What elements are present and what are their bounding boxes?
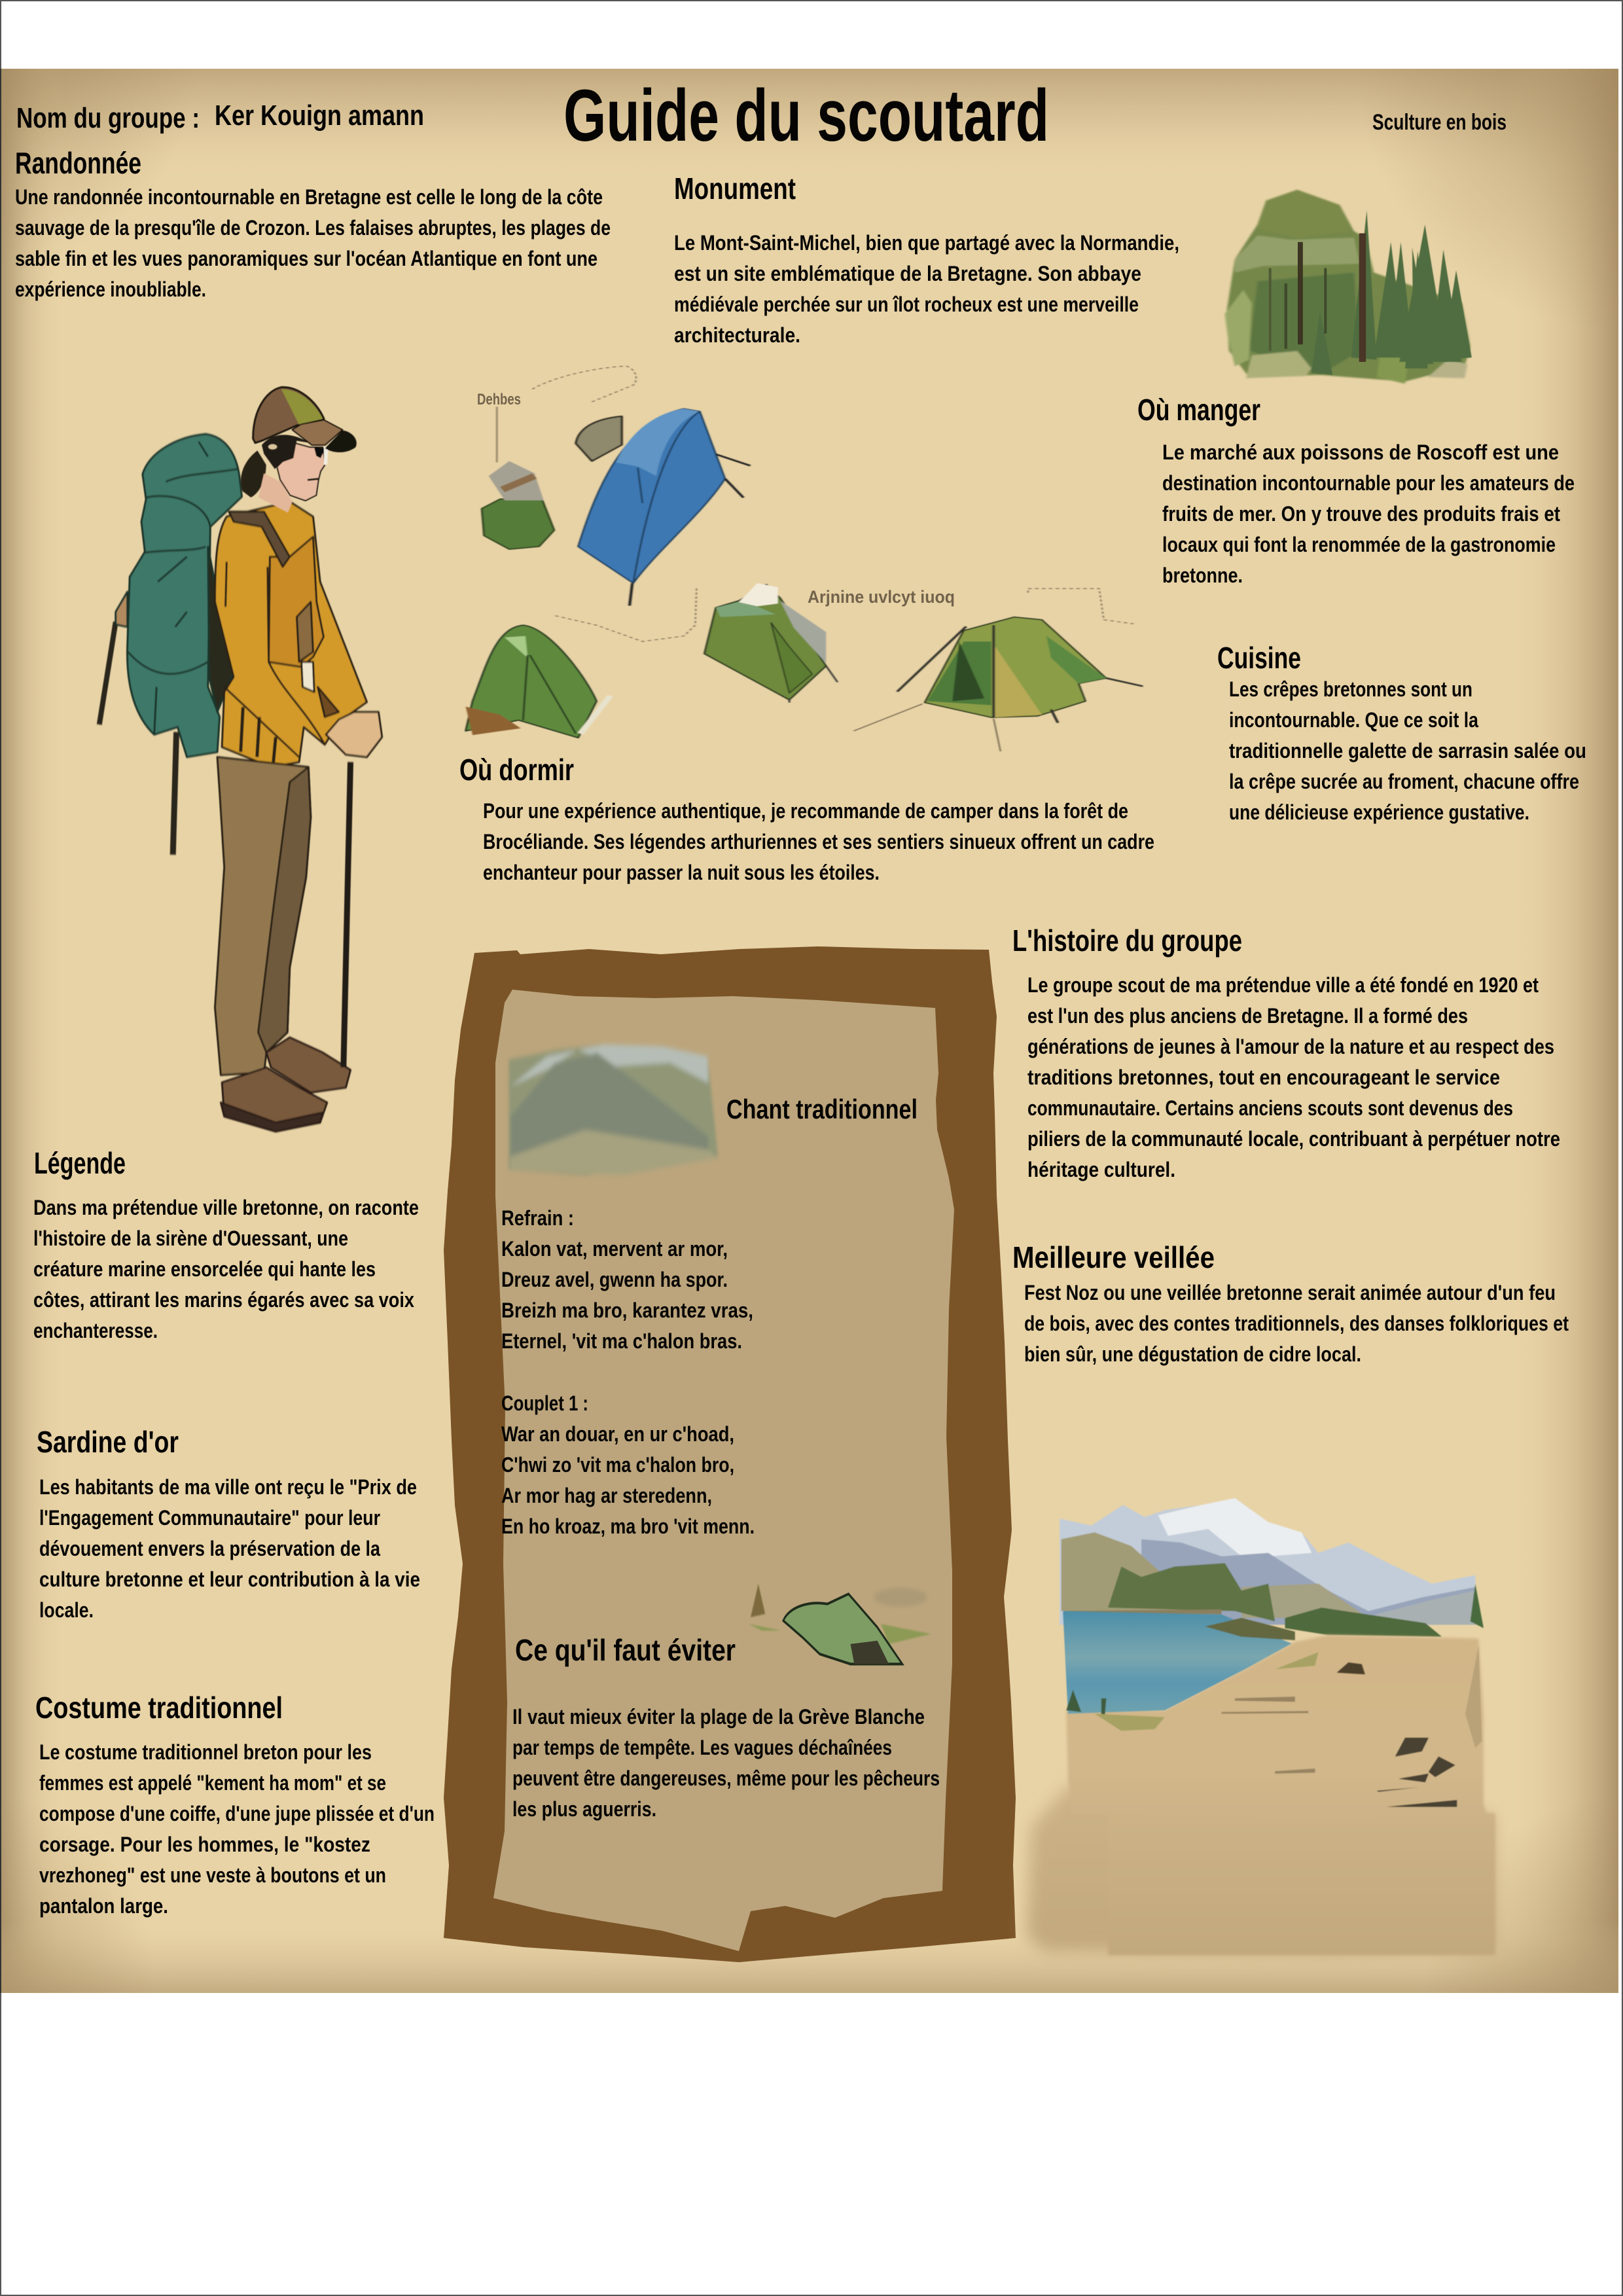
song lyrics: Eternel, 'vit ma c'halon bras. [501,1329,742,1353]
text block: L'histoire du groupe: traditions bretonnes, tout en encourageant le service [1027,1066,1500,1089]
text block: Sardine d'or [37,1425,420,1622]
text block: Randonnée: Une randonnée incontournable en Bretagne est celle le long de la côte [15,185,603,209]
text block: Où manger: Où manger [1137,393,1260,427]
song lyrics [501,1206,755,1538]
dotted guide lines [497,366,1133,751]
icon: green tent right [897,617,1143,723]
tree line [1108,1563,1275,1621]
warning text [512,1705,940,1821]
warning text: les plus aguerris. [512,1797,656,1821]
song lyrics: Refrain : [501,1206,574,1230]
warning text: peuvent être dangereuses, même pour les pêcheurs [512,1767,940,1790]
image: lake and mountains landscape [1026,1498,1495,1955]
illustration: hiker with backpack [99,434,382,1132]
text block: Costume traditionnel [35,1691,435,1918]
text block: Sardine d'or: Les habitants de ma ville ont reçu le "Prix de [39,1475,417,1499]
inner paper [493,990,954,1951]
text block: Meilleure veillée: bien sûr, une dégustation de cidre local. [1024,1342,1361,1366]
song lyrics: Dreuz avel, gwenn ha spor. [501,1268,728,1291]
text block: Légende: côtes, attirant les marins égarés avec sa voix [33,1288,414,1312]
song lyrics: Breizh ma bro, karantez vras, [501,1299,753,1322]
lake [1063,1611,1292,1713]
icon: backpack [116,434,242,757]
snowy mountains [1060,1498,1477,1624]
song lyrics: En ho kroaz, ma bro 'vit menn. [501,1515,755,1538]
text block: Cuisine: incontournable. Que ce soit la [1229,708,1478,732]
text block: Meilleure veillée [1012,1240,1569,1366]
icon: yellow jacket [215,502,367,767]
text block: Où manger: fruits de mer. On y trouve des produits frais et [1162,502,1560,526]
text block: Où dormir: enchanteur pour passer la nuit sous les étoiles. [483,861,880,884]
text block: Légende: créature marine ensorcelée qui hante les [33,1257,376,1281]
marks on the sand [1337,1662,1365,1674]
text block: Costume traditionnel: compose d'une coiffe, d'une jupe plissée et d'un [39,1802,435,1825]
group name: Ker Kouign amann [215,99,424,132]
text block: Monument: est un site emblématique de la Bretagne. Son abbaye [674,262,1141,285]
text block: Costume traditionnel: corsage. Pour les hommes, le "kostez [39,1833,370,1856]
text block: Légende [33,1146,419,1342]
group name: Nom du groupe : [16,102,200,134]
tent sketch label: Arjnine uvlcyt iuoq [808,587,955,607]
text block: Où dormir: Pour une expérience authentique, je recommande de camper dans la forêt de [483,799,1128,823]
icon: hiker head and cap [241,387,357,512]
text block: Cuisine [1217,641,1586,824]
warning text: par temps de tempête. Les vagues déchaînées [512,1736,892,1759]
text block: Où manger: bretonne. [1162,564,1243,587]
icon: hands [326,712,382,757]
text block: Où manger [1137,393,1575,587]
caption: Sculture en bois: Sculture en bois [1372,110,1507,135]
text block: Cuisine: Cuisine [1217,641,1301,675]
text block: Où dormir: Brocéliande. Ses légendes arthuriennes et ses sentiers sinueux offrent un cadre [483,830,1154,853]
text block: Où dormir: Où dormir [459,753,574,787]
text block: L'histoire du groupe: Le groupe scout de ma prétendue ville a été fondé en 1920 et [1027,973,1539,997]
text block: L'histoire du groupe: L'histoire du groupe [1012,924,1242,958]
text block: Randonnée: sable fin et les vues panoramiques sur l'océan Atlantique en font une [15,247,597,270]
song lyrics: C'hwi zo 'vit ma c'halon bro, [501,1453,734,1477]
warning text: Il vaut mieux éviter la plage de la Grève Blanche [512,1705,925,1729]
text block: Randonnée [15,146,611,301]
text block: L'histoire du groupe: est l'un des plus anciens de Bretagne. Il a formé des [1027,1004,1468,1028]
text block: Monument: Monument [674,171,796,206]
text block: L'histoire du groupe: héritage culturel. [1027,1158,1175,1181]
hills [1061,1532,1225,1611]
song lyrics: Ar mor hag ar steredenn, [501,1484,712,1507]
icon: blue tent [578,408,750,605]
text block: Légende: l'histoire de la sirène d'Ouessant, une [33,1227,348,1250]
text block: Cuisine: une délicieuse expérience gustative. [1229,800,1529,824]
text block: Randonnée: sauvage de la presqu'île de Crozon. Les falaises abruptes, les plages de [15,216,611,240]
icon: cooking pot on green bag [482,416,622,549]
icon: green tent left [466,625,611,738]
song lyrics: Couplet 1 : [501,1391,588,1415]
text block: L'histoire du groupe: communautaire. Certains anciens scouts sont devenus des [1027,1096,1513,1120]
group name [16,99,424,134]
icon: green tent middle [704,583,838,702]
text block: Sardine d'or: culture bretonne et leur contribution à la vie [39,1568,420,1591]
title: Guide du scoutard [563,75,1049,156]
text block: Légende: enchanteresse. [33,1319,158,1342]
text block: Costume traditionnel: vrezhoneg" est une veste à boutons et un [39,1863,386,1887]
text block: Costume traditionnel: pantalon large. [39,1894,168,1918]
image: small tent [749,1584,931,1664]
song lyrics: War an douar, en ur c'hoad, [501,1422,734,1446]
text block: Où manger: Le marché aux poissons de Roscoff est une [1162,440,1559,464]
text block: Costume traditionnel: femmes est appelé "kement ha mom" et se [39,1771,386,1795]
text block: Sardine d'or: dévouement envers la préservation de la [39,1537,380,1560]
text block: Sardine d'or: l'Engagement Communautaire" pour leur [39,1506,380,1530]
image: forest [1225,190,1472,384]
text block: Cuisine: Les crêpes bretonnes sont un [1229,677,1472,701]
text block: Monument: médiévale perchée sur un îlot rocheux est une merveille [674,293,1139,316]
text block: Monument [674,171,1179,347]
icon: walking stick [344,762,351,1067]
song lyrics: Kalon vat, mervent ar mor, [501,1237,728,1261]
text block: Sardine d'or: Sardine d'or [37,1425,179,1459]
text block: Monument: architecturale. [674,323,800,347]
text block: Où dormir [459,753,1154,884]
text block: Monument: Le Mont-Saint-Michel, bien que partagé avec la Normandie, [674,231,1179,255]
lower sand wash [1026,1785,1493,1953]
text block: Randonnée: Randonnée [15,146,141,180]
icon: trekking poles on pack [99,622,177,855]
brown torn frame [444,946,1016,1962]
icon: boots [221,1037,351,1132]
text block: Sardine d'or: locale. [39,1598,94,1622]
text block: Costume traditionnel: Costume traditionnel [35,1691,283,1725]
image: mountain [508,1045,718,1175]
icon: trousers [215,757,311,1075]
panel: parchment with song and warning [444,946,1016,1962]
tent sketch label: Dehbes [477,391,521,408]
text block: Costume traditionnel: Le costume traditionnel breton pour les [39,1740,372,1764]
sand [1066,1635,1489,1823]
text block: Randonnée: expérience inoubliable. [15,278,206,301]
text block: L'histoire du groupe [1012,924,1560,1181]
text block: Meilleure veillée: Meilleure veillée [1012,1240,1215,1274]
text block: Où manger: locaux qui font la renommée de la gastronomie [1162,533,1556,556]
heading: Chant traditionnel: Chant traditionnel [726,1094,918,1124]
illustration: tents [466,366,1143,751]
text block: Légende: Légende [34,1146,126,1180]
heading: Ce qu'il faut éviter: Ce qu'il faut éviter [515,1633,736,1667]
text block: Légende: Dans ma prétendue ville bretonne, on raconte [33,1196,419,1219]
